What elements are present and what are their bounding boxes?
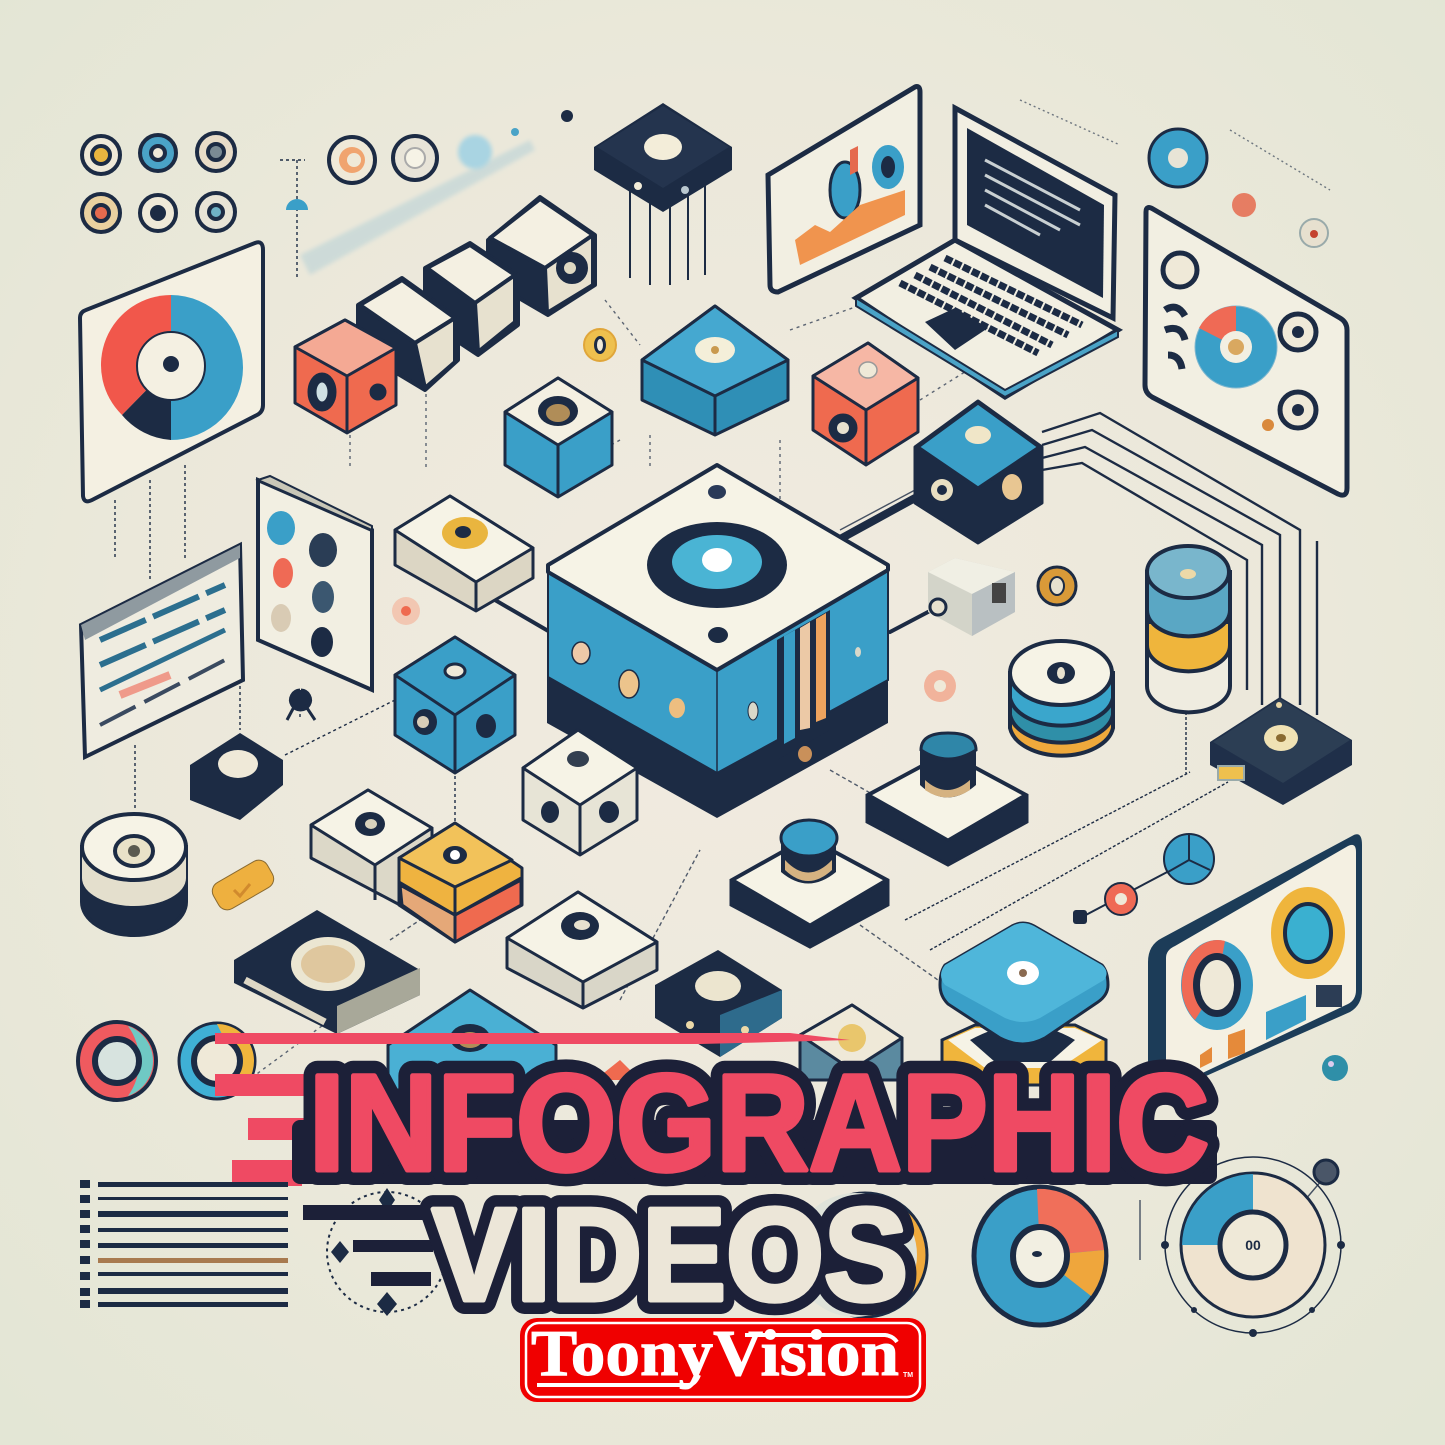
bottom-left ring charts xyxy=(78,1022,255,1100)
red cube right xyxy=(813,343,918,465)
dial label: 00 xyxy=(1245,1237,1261,1253)
navy node box xyxy=(1210,697,1352,805)
panel: tablet chart xyxy=(768,87,920,292)
blue cube xyxy=(505,378,612,497)
pink title streak bars xyxy=(215,1033,850,1186)
dial chart xyxy=(1161,1157,1345,1337)
list of bars xyxy=(80,1180,288,1308)
blue cube mid-left xyxy=(395,637,515,773)
top navy box xyxy=(594,103,732,212)
disk stack xyxy=(1010,641,1113,756)
linked nodes xyxy=(1073,834,1348,1081)
ring behind VIDEOS xyxy=(793,1193,927,1317)
title: INFOGRAPHIC: INFOGRAPHIC xyxy=(309,1047,1209,1200)
cylinder stack xyxy=(1147,546,1230,712)
cylinder disk xyxy=(82,814,186,935)
icon: top-right blue disc xyxy=(1149,129,1328,247)
title: INFOGRAPHIC: INFOGRAPHIC xyxy=(309,1047,1209,1200)
main box blue sides xyxy=(548,567,888,773)
laptop xyxy=(856,108,1118,397)
panel: phone card xyxy=(258,476,372,720)
blue top platform xyxy=(940,923,1108,1085)
icon group: top ring circles xyxy=(286,110,573,210)
cable links xyxy=(495,498,928,632)
subtitle: VIDEOS: VIDEOS xyxy=(432,1181,908,1328)
connector lines xyxy=(115,100,1330,1260)
subtitle bars xyxy=(303,1205,443,1286)
subtitle: VIDEOS: VIDEOS xyxy=(432,1181,908,1328)
cream block xyxy=(311,790,432,905)
panel: left donut chart xyxy=(80,242,263,501)
dice cube xyxy=(523,730,637,855)
cube row xyxy=(358,197,595,390)
logo text: ToonyVision xyxy=(531,1317,899,1390)
panel: right dashboard xyxy=(1145,208,1347,495)
main central box xyxy=(547,465,888,818)
blue box under title xyxy=(388,990,640,1090)
main box base xyxy=(547,660,888,818)
yellow tag xyxy=(209,857,277,913)
grey small cube and ring xyxy=(392,558,1076,702)
dotted orbit xyxy=(327,1188,447,1316)
logo badge: ToonyVision xyxy=(520,1317,926,1402)
logo badge: ToonyVision: TM xyxy=(903,1372,913,1379)
cream flat box xyxy=(507,892,657,1008)
small cube under line xyxy=(800,1005,902,1080)
panel: bottom-right dashboard xyxy=(1148,834,1362,1094)
pie chart xyxy=(974,1187,1106,1325)
icon group: top-left circles xyxy=(82,133,235,232)
puck with cap right xyxy=(867,733,1027,865)
main box top xyxy=(548,465,888,670)
navy cube with blue top xyxy=(915,401,1042,543)
red cube xyxy=(295,320,396,433)
panel: left list card xyxy=(81,545,243,757)
small yellow ring xyxy=(584,329,616,361)
puck with cap xyxy=(731,820,888,947)
blue box xyxy=(642,306,788,435)
yellow block xyxy=(399,823,522,942)
navy box bottom xyxy=(655,950,782,1057)
light streak xyxy=(300,140,535,275)
navy flat box xyxy=(234,910,420,1034)
navy puck xyxy=(190,733,283,820)
cream flat card xyxy=(395,496,533,611)
